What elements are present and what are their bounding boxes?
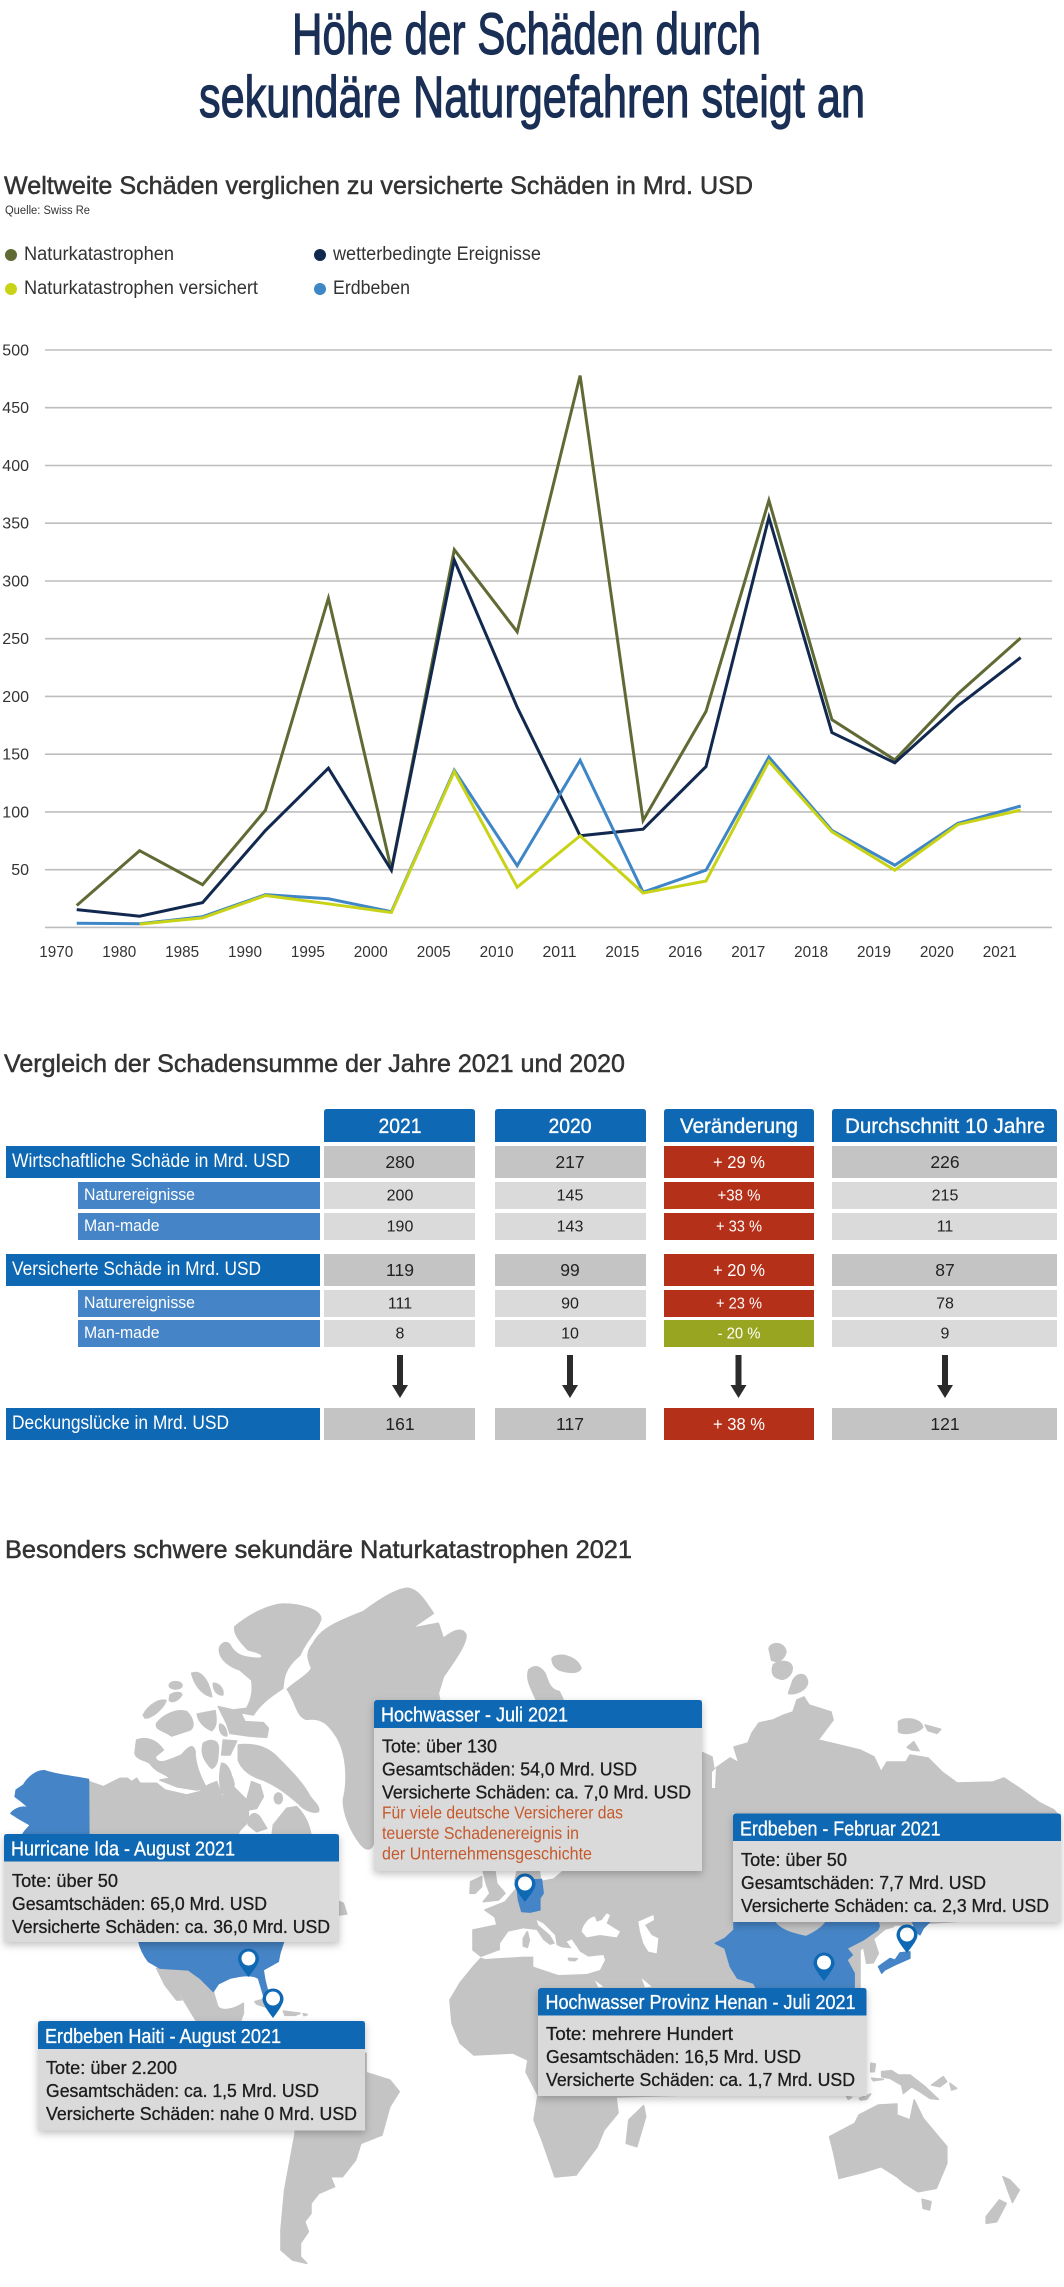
x axis labels: 2005: [417, 944, 451, 961]
row: Wirtschaftliche Schäde: [6, 1146, 1057, 1178]
y axis labels: 350: [2, 516, 29, 532]
row: Versicherte Schäde: 99: [560, 1260, 580, 1280]
Alaska highlighted: [11, 1771, 89, 1840]
row: Deckungslücke: 117: [556, 1414, 584, 1434]
callout: Hurricane Ida: Versicherte Schäden: ca. 36,0 Mrd. USD: [12, 1917, 330, 1937]
series: wetterbedingte Ereignisse: [77, 517, 1021, 916]
x axis labels: 2020: [920, 944, 954, 961]
legend: wetterbedingte Ereignisse: [332, 244, 541, 265]
x axis labels: 1995: [291, 944, 325, 961]
row: Naturereignisse: 215: [932, 1188, 958, 1204]
arrows down: [392, 1355, 953, 1398]
x axis labels: 2015: [605, 944, 639, 961]
row: Naturereignisse: +38 %: [718, 1188, 760, 1204]
callout: Erdbeben Haiti: Gesamtschäden: ca. 1,5 Mrd. USD: [46, 2081, 319, 2101]
callout: Hochwasser Juli 2021: der Unternehmensgeschichte: [382, 1844, 592, 1864]
row: Man-made: 190: [387, 1218, 413, 1236]
y axis labels: 150: [2, 746, 29, 764]
row: Deckungslücke: 121: [930, 1414, 960, 1434]
row: Deckungslücke: + 38 %: [713, 1414, 765, 1434]
row: versicherte Naturereignisse: 90: [561, 1296, 579, 1312]
x axis labels: 2016: [668, 944, 702, 961]
legend: Naturkatastrophen versichert: [24, 278, 259, 299]
series: Erdbeben: [77, 757, 1021, 924]
row: Naturereignisse: 200: [387, 1188, 413, 1204]
y axis labels: 250: [2, 631, 29, 648]
row: Versicherte Schäde: + 20 %: [713, 1260, 765, 1280]
x axis labels: 2021: [983, 944, 1017, 961]
Eurasia and Africa: [450, 1697, 1058, 2177]
callout: Hochwasser Provinz Henan: Versicherte Schäden: ca. 1,7 Mrd. USD: [546, 2070, 855, 2090]
x axis labels: 2018: [794, 944, 828, 961]
row: versicherte Man-made: [78, 1320, 1057, 1347]
China highlighted: [715, 1920, 882, 1993]
column headers: [324, 1109, 1057, 1142]
row: Versicherte Schäde: 119: [386, 1260, 414, 1280]
y axis labels: 200: [2, 689, 29, 706]
row: Naturereignisse: Naturereignisse: [84, 1185, 195, 1204]
row: Wirtschaftliche Schäde: 217: [555, 1152, 585, 1172]
row: Versicherte Schäde: 87: [935, 1260, 955, 1280]
USA highlighted: [138, 1940, 284, 1995]
callout: Erdbeben Haiti: Tote: über 2.200: [46, 2058, 177, 2078]
y axis labels: 500: [2, 342, 29, 360]
callout: Hochwasser Provinz Henan: Hochwasser Provinz Henan - Juli 2021: [546, 1992, 856, 2014]
column headers: Veränderung: [680, 1115, 798, 1138]
row: Wirtschaftliche Schäde: + 29 %: [713, 1152, 765, 1172]
row: versicherte Man-made: 9: [941, 1326, 950, 1342]
Europe, seas and islands: [470, 1871, 658, 1987]
x axis labels: 2011: [542, 944, 577, 961]
pin: Henan: [814, 1952, 834, 1981]
callout: Erdbeben Haiti: Versicherte Schäden: nahe 0 Mrd. USD: [46, 2104, 357, 2124]
row: Man-made: 11: [937, 1218, 953, 1236]
x axis labels: 2019: [857, 944, 891, 961]
callout: Erdbeben Februar 2021: Versicherte Schäden: ca. 2,3 Mrd. USD: [741, 1896, 1049, 1916]
y axis labels: 300: [2, 574, 29, 590]
Australia, Madagascar, New Zealand: [626, 2100, 1019, 2223]
row: versicherte Naturereignisse: 78: [936, 1296, 954, 1312]
South America: [281, 2053, 399, 2263]
heading: map: Besonders schwere sekundäre Naturkatastrophen 2021: [5, 1536, 632, 1564]
heading: table: Vergleich der Schadensumme der Jahre 2021 und 2020: [4, 1050, 625, 1078]
row: Man-made: 143: [557, 1218, 583, 1236]
callout: Hochwasser Provinz Henan: Gesamtschäden: 16,5 Mrd. USD: [546, 2047, 801, 2067]
callout: Hochwasser Juli 2021: teuerste Schadenereignis in: [382, 1823, 579, 1843]
row: Man-made: Man-made: [84, 1216, 160, 1235]
pin: Hurricane Ida: [238, 1948, 259, 1977]
callout: Hochwasser Juli 2021: Versicherte Schäden: ca. 7,0 Mrd. USD: [382, 1782, 691, 1802]
column headers: Durchschnitt 10 Jahre: [845, 1115, 1045, 1138]
x axis labels: 1990: [228, 944, 262, 961]
row: Naturereignisse: 145: [557, 1188, 583, 1204]
callout: Hurricane Ida: Tote: über 50: [12, 1871, 118, 1891]
series: Naturkatastrophen: [77, 376, 1021, 906]
x axis labels: 2010: [480, 944, 514, 961]
series: Naturkatastrophen versichert: [140, 761, 1021, 924]
Germany highlighted: [517, 1879, 543, 1912]
callout: Hochwasser Juli 2021: Hochwasser - Juli 2021: [381, 1704, 568, 1726]
callout: Hurricane Ida: Hurricane Ida - August 2021: [11, 1838, 235, 1860]
y axis labels: 50: [11, 862, 29, 879]
callout: Erdbeben Haiti: [38, 2021, 365, 2130]
callout: Hurricane Ida: [4, 1834, 339, 1942]
row: Deckungslücke: Deckungslücke in Mrd. USD: [12, 1412, 229, 1434]
callout: Erdbeben Februar 2021: Tote: über 50: [741, 1850, 847, 1870]
row: versicherte Naturereignisse: Naturereignisse: [84, 1293, 195, 1312]
legend: Naturkatastrophen: [24, 244, 174, 265]
pin: Haiti: [262, 1988, 284, 2018]
row: Wirtschaftliche Schäde: 280: [385, 1152, 415, 1172]
pin: Germany: [514, 1874, 536, 1902]
row: Naturereignisse: [78, 1182, 1057, 1209]
y axis labels: 450: [2, 400, 29, 417]
row: versicherte Naturereignisse: 111: [388, 1296, 412, 1312]
x axis labels: 2000: [354, 944, 388, 961]
x axis labels: 1980: [102, 944, 136, 961]
x axis labels: [39, 944, 1017, 961]
row: Wirtschaftliche Schäde: Wirtschaftliche Schäde in Mrd. USD: [12, 1150, 290, 1172]
callout: Hochwasser Provinz Henan: [538, 1988, 866, 2096]
callout: Erdbeben Februar 2021: Erdbeben - Februar 2021: [740, 1818, 940, 1840]
row: Deckungslücke: [6, 1408, 1057, 1440]
callout: Erdbeben Februar 2021: Gesamtschäden: 7,7 Mrd. USD: [741, 1873, 986, 1893]
x axis labels: 1970: [39, 944, 73, 961]
callout: Erdbeben Februar 2021: [733, 1814, 1061, 1922]
y axis labels: 100: [2, 804, 29, 822]
callout: Hochwasser Juli 2021: Tote: über 130: [382, 1736, 497, 1756]
column headers: 2020: [548, 1115, 592, 1138]
North America and Greenland: [11, 1588, 466, 2027]
row: versicherte Naturereignisse: + 23 %: [716, 1296, 762, 1312]
column headers: 2021: [378, 1115, 422, 1138]
row: versicherte Man-made: - 20 %: [718, 1326, 760, 1342]
row: Deckungslücke: 161: [385, 1414, 415, 1434]
callout: Hochwasser Provinz Henan: Tote: mehrere Hundert: [546, 2024, 733, 2044]
legend: [5, 244, 541, 299]
comparison table: [6, 1109, 1057, 1440]
x axis labels: 1985: [165, 944, 199, 961]
Korea and Japan: [847, 1920, 957, 2100]
row: versicherte Man-made: Man-made: [84, 1323, 160, 1342]
row: versicherte Man-made: 10: [561, 1326, 579, 1342]
y axis labels: 400: [2, 458, 29, 475]
line chart: [2, 342, 1052, 961]
callout: Hochwasser Juli 2021: Gesamtschäden: 54,0 Mrd. USD: [382, 1760, 637, 1780]
world map: [11, 1588, 1058, 2263]
title: [199, 2, 865, 130]
title: Höhe der Schäden durch: [292, 2, 761, 67]
row: versicherte Man-made: 8: [396, 1326, 405, 1342]
row: Versicherte Schäde: Versicherte Schäde in Mrd. USD: [12, 1258, 261, 1280]
callout: Hochwasser Juli 2021: [374, 1700, 702, 1871]
callout: Hochwasser Juli 2021: Für viele deutsche Versicherer das: [382, 1802, 623, 1822]
callout: Hurricane Ida: Gesamtschäden: 65,0 Mrd. USD: [12, 1894, 267, 1914]
row: Man-made: [78, 1213, 1057, 1240]
Arctic islands: [528, 1644, 941, 1751]
source note: Quelle: Swiss Re: [5, 205, 90, 217]
heading: chart: Weltweite Schäden verglichen zu versicherte Schäden in Mrd. USD: [4, 172, 753, 200]
pin: Japan: [896, 1925, 918, 1953]
y axis labels: [2, 342, 29, 879]
row: versicherte Naturereignisse: [78, 1290, 1057, 1317]
row: Man-made: + 33 %: [716, 1218, 762, 1236]
legend: Erdbeben: [333, 278, 410, 299]
row: Wirtschaftliche Schäde: 226: [930, 1152, 960, 1172]
row: Versicherte Schäde: [6, 1254, 1057, 1286]
x axis labels: 2017: [731, 944, 765, 961]
callout: Erdbeben Haiti: Erdbeben Haiti - August 2021: [45, 2026, 281, 2048]
